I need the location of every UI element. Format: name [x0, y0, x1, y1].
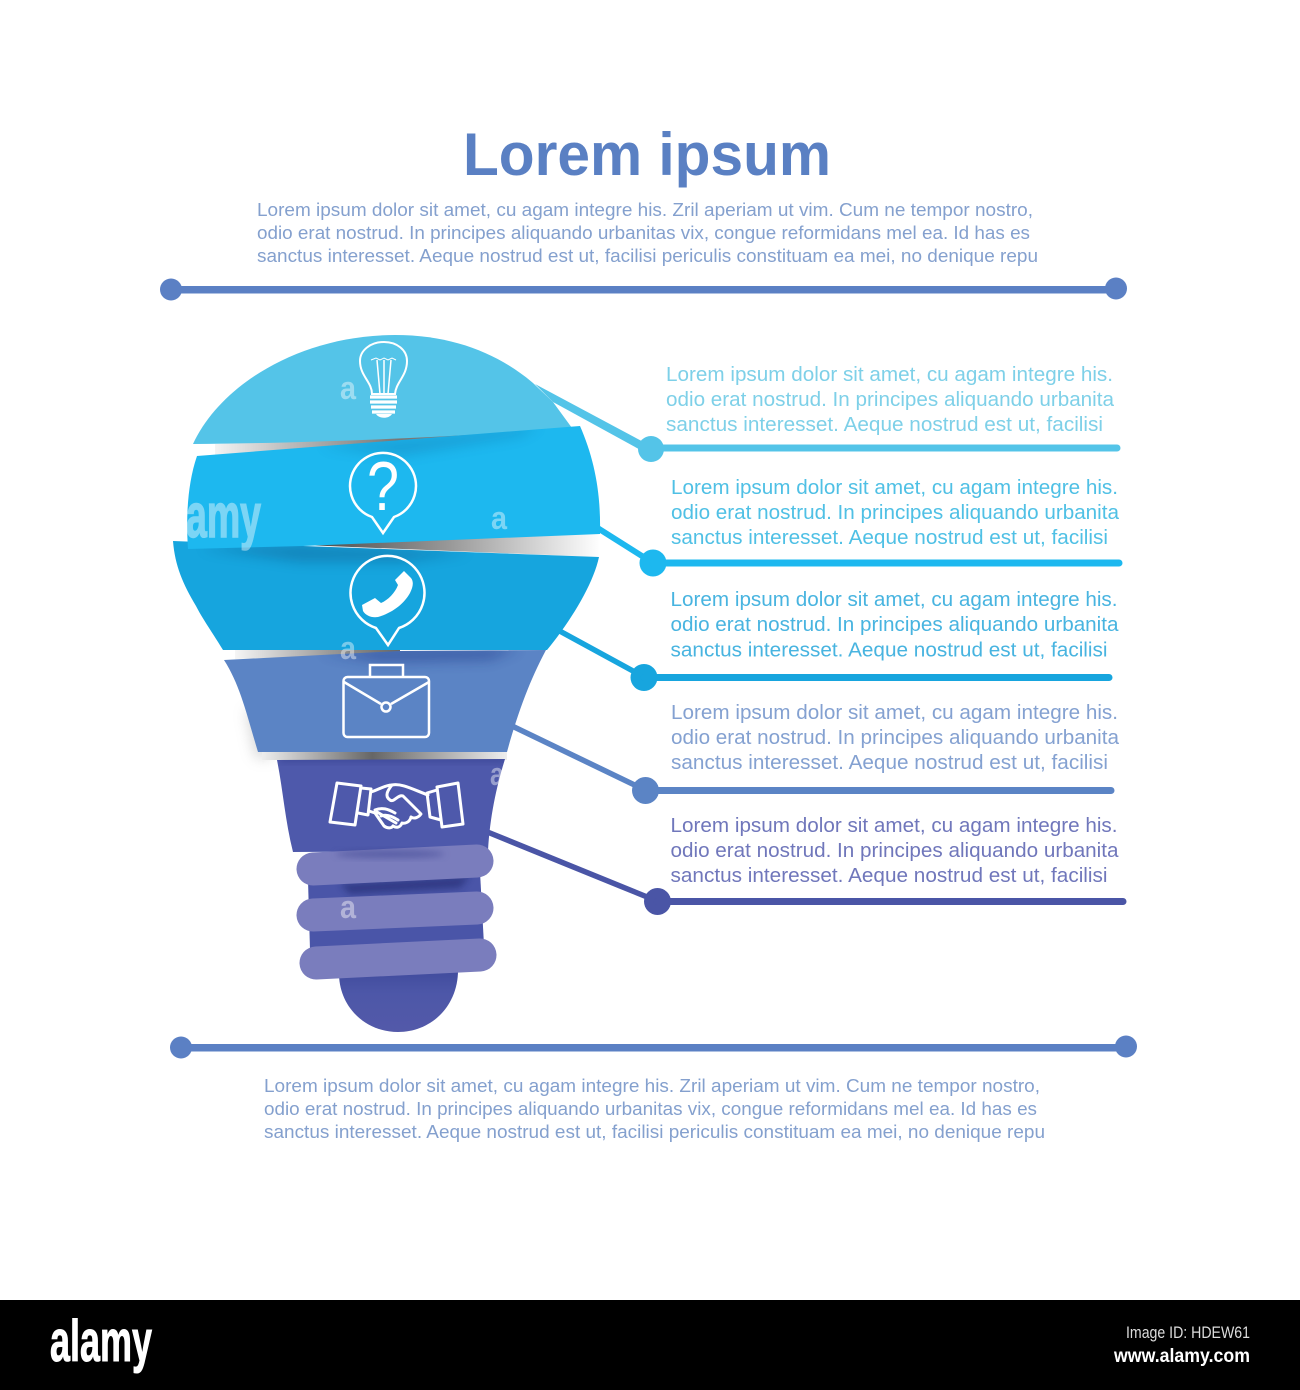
icon: light bulb [360, 342, 407, 418]
text block 2: Lorem ipsum dolor sit amet, cu agam integre his. [671, 477, 1118, 499]
screw ring 1 [313, 861, 477, 869]
icon: phone bubble [350, 556, 424, 645]
text block 2: odio erat nostrud. In principes aliquando urbanita [671, 502, 1120, 524]
intro text block: sanctus interesset. Aeque nostrud est ut, facilisi periculis constituam ea mei, no denique repu [257, 245, 1038, 266]
bottom divider [170, 1036, 1137, 1058]
bulb band 3 top shading [200, 544, 470, 562]
text block 2: sanctus interesset. Aeque nostrud est ut, facilisi [671, 527, 1108, 549]
closing text block: Lorem ipsum dolor sit amet, cu agam integre his. Zril aperiam ut vim. Cum ne tempor nostro, [264, 1075, 1040, 1096]
connector 3 [556, 629, 1109, 691]
top divider [160, 278, 1127, 300]
watermark fragments on bulb: a [340, 630, 356, 666]
text block 1: sanctus interesset. Aeque nostrud est ut, facilisi [666, 414, 1103, 436]
closing text block: odio erat nostrud. In principes aliquando urbanitas vix, congue reformidans mel ea. Id has es [264, 1098, 1037, 1119]
text block 2 [671, 477, 1120, 549]
shadow below top band [215, 428, 572, 455]
icon: question bubble: ? [367, 447, 399, 525]
connector 2 [596, 527, 1119, 576]
watermark fragments on bulb: a [491, 500, 507, 536]
intro text block: Lorem ipsum dolor sit amet, cu agam integre his. Zril aperiam ut vim. Cum ne tempor nostro, [257, 199, 1033, 220]
text block 3 [670, 589, 1119, 662]
text block 3: odio erat nostrud. In principes aliquando urbanita [670, 614, 1119, 636]
text block 3: sanctus interesset. Aeque nostrud est ut, facilisi [670, 640, 1108, 662]
icon: briefcase [344, 665, 429, 737]
text block 5: Lorem ipsum dolor sit amet, cu agam integre his. [670, 815, 1118, 837]
intro text block: odio erat nostrud. In principes aliquando urbanitas vix, congue reformidans mel ea. Id has es [257, 222, 1030, 243]
watermark fragments on bulb [186, 370, 507, 925]
soft shadow left of fourth band [246, 710, 272, 758]
text block 4: sanctus interesset. Aeque nostrud est ut, facilisi [671, 752, 1108, 774]
image id: Image ID: HDEW61 [1126, 1323, 1250, 1342]
footer logo: alamy [50, 1309, 152, 1374]
light bulb illustration [173, 335, 600, 1032]
watermark fragments on bulb: a [340, 370, 356, 406]
screw thread body [308, 872, 484, 950]
bulb band 4 top shading [320, 648, 520, 662]
watermark fragments on bulb: a [340, 889, 356, 925]
watermark fragments on bulb: amy [186, 482, 261, 551]
text block 1 [666, 364, 1115, 436]
bulb band 3: deep cyan [173, 541, 599, 650]
thread shading [340, 876, 470, 894]
footer bar [0, 1300, 1300, 1390]
footer url: www.alamy.com [1113, 1346, 1250, 1367]
text block 5: sanctus interesset. Aeque nostrud est ut, facilisi [670, 865, 1108, 887]
text block 5: odio erat nostrud. In principes aliquando urbanita [670, 840, 1119, 862]
shadow below third band [235, 650, 400, 659]
text block 4: Lorem ipsum dolor sit amet, cu agam integre his. [671, 702, 1118, 724]
screw ring 3 [316, 955, 480, 963]
connector 5 [485, 831, 1123, 915]
text block 4: odio erat nostrud. In principes aliquando urbanita [671, 727, 1120, 749]
shadow below fourth band [262, 752, 507, 760]
screw ring 2 [313, 908, 477, 915]
closing text block: sanctus interesset. Aeque nostrud est ut, facilisi periculis constituam ea mei, no denique repu [264, 1121, 1045, 1142]
icon: handshake [330, 783, 463, 828]
closing text block [264, 1075, 1045, 1142]
text block 1: odio erat nostrud. In principes aliquando urbanita [666, 389, 1115, 411]
bulb base cap [339, 968, 458, 1032]
bulb band 1: light sky blue [193, 335, 572, 444]
text block 5 [670, 815, 1119, 887]
shadow under band 5 on first ring [335, 850, 445, 858]
bulb band 4: mid blue [224, 650, 546, 752]
bulb band 2: bright cyan [187, 426, 600, 549]
bulb band 5 top shading [282, 759, 505, 762]
text block 3: Lorem ipsum dolor sit amet, cu agam integre his. [670, 589, 1118, 611]
title: Lorem ipsum [463, 121, 831, 188]
watermark fragments on bulb: a [490, 756, 504, 792]
text block 4 [671, 702, 1120, 774]
connector 4 [510, 725, 1111, 804]
icon: question bubble [350, 447, 416, 533]
intro text block [257, 199, 1038, 266]
text block 1: Lorem ipsum dolor sit amet, cu agam integre his. [666, 364, 1113, 386]
bulb band 2 top shading [344, 430, 527, 458]
shadow below second band [303, 533, 600, 557]
bulb band 5: indigo [277, 759, 505, 852]
connector 1 [535, 384, 1117, 462]
